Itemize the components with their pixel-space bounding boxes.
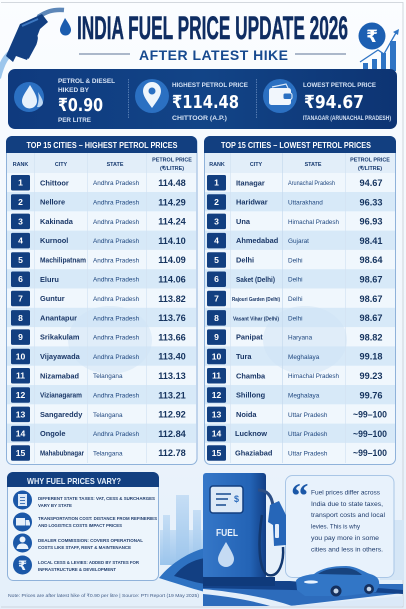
quote text: levies. This is why <box>311 524 361 530</box>
item: local cess <box>13 556 139 574</box>
illustration: fuel pump: $ <box>234 494 239 504</box>
rows: Ongole <box>40 429 65 438</box>
rows: Andhra Pradesh <box>93 200 140 206</box>
item: transportation cost: TRANSPORTATION COST: DISTANCE FROM REFINERIES <box>38 516 158 522</box>
rows: 12 <box>16 390 25 400</box>
rows: Sangareddy <box>40 410 83 419</box>
item: state taxes: DIFFERENT STATE TAXES: VAT, CESS & SURCHARGES <box>38 496 156 502</box>
rows: Andhra Pradesh <box>93 335 140 342</box>
item: dealer commission: COSTS LIKE STAFF, RENT & MAINTENANCE <box>38 545 132 551</box>
stat: fuel hike: PER LITRE <box>58 117 91 124</box>
rows: 8 <box>214 313 219 323</box>
panel: why fuel prices vary <box>7 472 159 580</box>
rows: Una <box>236 217 251 226</box>
rows: Haryana <box>288 335 313 342</box>
rows: 113.40 <box>158 352 186 362</box>
rows: 7 <box>214 294 219 304</box>
rows: Rajouri Garden (Delhi) <box>232 297 280 303</box>
rows: 4 <box>214 236 219 246</box>
rows: Andhra Pradesh <box>93 238 140 245</box>
rows: 1 <box>18 178 23 188</box>
column headers: CITY <box>55 162 68 168</box>
rows: Shillong <box>236 391 266 400</box>
panel heading: WHY FUEL PRICES VARY? <box>27 477 121 486</box>
item: state taxes <box>13 490 156 510</box>
rows <box>11 175 187 461</box>
rows: 6 <box>214 274 219 284</box>
rows: 14 <box>212 429 221 439</box>
rows: Telangana <box>93 450 123 457</box>
rows: Anantapur <box>40 313 77 322</box>
quote text <box>311 490 386 554</box>
rows: 114.24 <box>158 217 187 227</box>
rows: Andhra Pradesh <box>93 315 140 322</box>
rows: Panipat <box>236 333 263 342</box>
rows: 10 <box>16 351 25 361</box>
rows: 96.33 <box>360 197 382 207</box>
item: transportation cost: AND LOGISTICS COSTS IMPACT PRICES <box>38 523 123 529</box>
rows: Mahabubnagar <box>40 448 84 458</box>
rows: Uttar Pradesh <box>288 412 328 419</box>
rows: Chamba <box>236 371 266 380</box>
column headers: CITY <box>250 162 263 168</box>
stat: fuel hike: PETROL & DIESEL <box>58 78 115 85</box>
rows: Machilipatnam <box>40 256 86 264</box>
item: transportation cost <box>13 512 158 532</box>
quote text: transport costs and local <box>311 512 386 519</box>
rows: Andhra Pradesh <box>93 392 140 400</box>
rows: Uttar Pradesh <box>288 431 328 438</box>
rows: 13 <box>16 409 25 419</box>
column headers: RANK <box>13 162 28 168</box>
rows: 113.76 <box>158 313 186 323</box>
background: road <box>159 548 403 606</box>
rows: Uttar Pradesh <box>288 450 328 457</box>
rows: Haridwar <box>236 198 268 207</box>
rows: Delhi <box>288 315 303 322</box>
callout: quote <box>286 476 394 578</box>
item: dealer commission <box>13 534 143 552</box>
rows: Delhi <box>236 256 254 264</box>
rows: 3 <box>214 216 219 226</box>
rows: Itanagar <box>236 178 265 187</box>
background: city skyline <box>160 495 404 580</box>
rows: Telangana <box>93 412 123 419</box>
rows: 10 <box>212 351 221 361</box>
rows: Kakinada <box>40 217 74 226</box>
rows: Guntur <box>40 294 65 303</box>
rows: Andhra Pradesh <box>93 431 140 438</box>
column headers: RANK <box>209 162 225 168</box>
rows: Andhra Pradesh <box>93 257 140 264</box>
rows: 1 <box>214 178 219 188</box>
illustration: fuel pump: FUEL <box>216 528 238 539</box>
rows: 113.21 <box>158 390 186 400</box>
table heading <box>204 136 396 153</box>
rows: Nellore <box>40 198 65 207</box>
rows: Noida <box>236 410 257 419</box>
rows: ~99–100 <box>353 429 387 439</box>
rows: 12 <box>212 390 221 400</box>
rows: 99.18 <box>360 352 382 362</box>
stat: lowest petrol price: ₹94.67 <box>304 92 364 113</box>
rows: 98.41 <box>360 236 382 246</box>
rows: 15 <box>16 448 25 458</box>
rows: Himachal Pradesh <box>288 219 339 226</box>
column headers <box>209 158 390 172</box>
rows: 114.09 <box>158 255 186 265</box>
column headers: (₹/LITRE) <box>358 166 382 172</box>
panel heading <box>7 472 159 487</box>
subtitle: AFTER LATEST HIKE <box>139 47 288 63</box>
panel: key figures banner <box>8 69 397 129</box>
rows: 11 <box>16 371 25 381</box>
rows <box>207 175 387 461</box>
rows: 114.10 <box>158 236 186 246</box>
illustration: fuel pump <box>203 473 286 586</box>
quote text: India due to state taxes, <box>311 501 383 508</box>
rows: 96.93 <box>360 217 382 227</box>
rows: 9 <box>214 332 219 342</box>
rows: 5 <box>18 255 23 265</box>
rows: 5 <box>214 255 219 265</box>
table heading: TOP 15 CITIES – LOWEST PETROL PRICES <box>221 140 371 150</box>
rows: Saket (Delhi) <box>236 275 275 284</box>
stat: lowest petrol price: LOWEST PETROL PRICE <box>303 82 376 89</box>
rows: ~99–100 <box>353 448 387 458</box>
rows: Himachal Pradesh <box>288 373 339 380</box>
icon: title fuel drop <box>60 18 71 36</box>
quote mark: “ <box>291 476 308 515</box>
rows: 15 <box>212 448 221 458</box>
item: dealer commission: DEALER COMMISSION: COVERS OPERATIONAL <box>38 538 143 544</box>
stat: lowest petrol price: ITANAGAR (ARUNACHAL PRADESH) <box>303 116 391 122</box>
stat: highest petrol price: CHITTOOR (A.P.) <box>172 115 227 122</box>
rows: 4 <box>18 236 23 246</box>
rows: 9 <box>18 332 23 342</box>
stat: fuel hike: HIKED BY <box>58 87 90 94</box>
column headers: STATE <box>107 162 124 168</box>
footnote: Note: Prices are after latest hike of ₹0.90 per litre | Source: PTI Report (19 May 2025) <box>8 593 200 598</box>
rows: 94.67 <box>360 178 382 188</box>
rows: 99.76 <box>360 390 382 400</box>
table heading <box>6 136 197 153</box>
column headers: PETROL PRICE <box>350 158 390 164</box>
column headers: (₹/LITRE) <box>160 166 184 172</box>
column headers <box>13 158 192 172</box>
rows: Ghaziabad <box>235 448 273 458</box>
stat: fuel hike: ₹0.90 <box>58 95 103 116</box>
rows: 114.29 <box>158 197 186 207</box>
rows: 98.82 <box>360 332 382 342</box>
rows: Nizamabad <box>40 371 80 380</box>
rows: 114.48 <box>158 178 186 188</box>
item: state taxes: VARY BY STATE <box>38 503 73 509</box>
icon: rupee rising chart <box>358 22 399 71</box>
rows: Meghalaya <box>288 354 320 361</box>
icon: rupee rising chart: ₹ <box>366 27 378 47</box>
rows: Ahmedabad <box>236 236 279 245</box>
column headers: STATE <box>305 162 322 168</box>
rows: Srikakulam <box>40 333 80 342</box>
rows: Andhra Pradesh <box>93 354 140 361</box>
illustration: car <box>296 566 379 596</box>
item: local cess: LOCAL CESS & LEVIES: ADDED BY STATES FOR <box>38 560 139 566</box>
quote text: Fuel prices differ across <box>311 490 381 496</box>
rows: Andhra Pradesh <box>93 219 140 226</box>
stat: lowest petrol price <box>263 79 391 122</box>
rows: Arunachal Pradesh <box>288 180 335 187</box>
rows: Vizianagaram <box>40 391 82 400</box>
stat: fuel hike <box>14 78 115 124</box>
item: local cess: ₹ <box>18 559 27 574</box>
rows: 113.82 <box>158 294 186 304</box>
stat: highest petrol price: ₹114.48 <box>172 92 239 113</box>
rows: Andhra Pradesh <box>93 296 140 303</box>
rows: 3 <box>18 216 23 226</box>
stat: highest petrol price <box>135 79 248 122</box>
panel: highest petrol prices table <box>6 136 197 464</box>
rows: Tura <box>236 352 252 361</box>
rows: Gujarat <box>288 238 309 245</box>
rows: 98.67 <box>360 313 382 323</box>
icon: fuel nozzle <box>0 10 64 78</box>
panel: lowest petrol prices table <box>204 136 396 464</box>
quote text: cities and less in others. <box>311 546 383 554</box>
rows: 13 <box>212 409 221 419</box>
rows: 112.84 <box>158 429 187 439</box>
rows: Delhi <box>288 257 303 264</box>
rows: ~99–100 <box>353 410 387 420</box>
rows: 112.92 <box>158 410 186 420</box>
rows: 2 <box>214 197 219 207</box>
rows: Vasant Vihar (Delhi) <box>233 316 279 322</box>
rows: 14 <box>16 429 25 439</box>
rows: Chittoor <box>40 178 69 187</box>
rows: 113.66 <box>158 332 186 342</box>
rows: Eluru <box>40 275 59 284</box>
rows: Delhi <box>288 277 303 284</box>
rows: Kurnool <box>40 236 68 245</box>
rows: 113.13 <box>158 371 186 381</box>
rows: 7 <box>18 294 23 304</box>
rows: Uttarakhand <box>288 200 323 206</box>
rows: 8 <box>18 313 23 323</box>
item: local cess: INFRASTRUCTURE & DEVELOPMENT <box>38 567 116 573</box>
table heading: TOP 15 CITIES – HIGHEST PETROL PRICES <box>26 140 178 150</box>
rows: Vijayawada <box>40 352 81 361</box>
rows: 98.64 <box>360 255 383 265</box>
rows: Meghalaya <box>288 392 320 400</box>
rows: 112.78 <box>158 448 186 458</box>
rows: 6 <box>18 274 23 284</box>
column headers: PETROL PRICE <box>152 158 192 164</box>
rows: 114.06 <box>158 274 186 284</box>
rows: Delhi <box>288 296 303 303</box>
rows: Andhra Pradesh <box>93 277 140 284</box>
rows: 2 <box>18 197 23 207</box>
rows: Lucknow <box>235 429 267 438</box>
rows: 98.67 <box>360 294 382 304</box>
rows: 98.67 <box>360 274 382 284</box>
rows: 11 <box>212 371 221 381</box>
rows: 99.23 <box>360 371 382 381</box>
quote text: you pay more in some <box>311 535 379 542</box>
rows: Telangana <box>93 373 123 380</box>
stat: highest petrol price: HIGHEST PETROL PRICE <box>172 82 248 89</box>
rows: Andhra Pradesh <box>93 180 140 187</box>
